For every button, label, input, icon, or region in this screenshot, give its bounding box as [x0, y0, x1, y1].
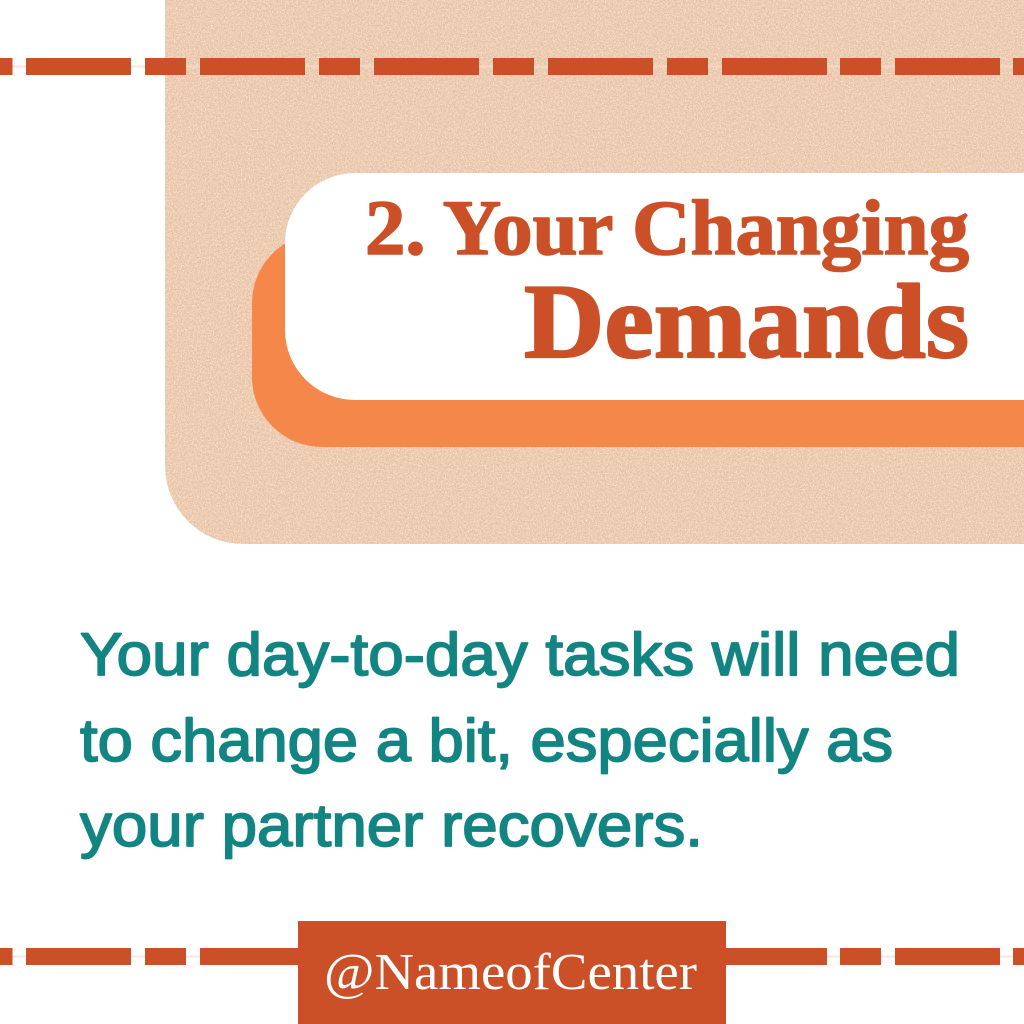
card: white: [285, 173, 1024, 400]
title card: [252, 173, 1024, 447]
bottom dashed line: [0, 948, 1024, 965]
top dashed line: [0, 58, 1024, 75]
handle text: @NameofCenter: [324, 944, 697, 1001]
body line 3: your partner recovers.: [80, 792, 703, 859]
body line 2: to change a bit, especially as: [80, 707, 893, 774]
body line 1: Your day-to-day tasks will need: [80, 621, 960, 688]
body text: [80, 621, 960, 859]
card shadow: orange: [252, 233, 1024, 447]
handle tag: [298, 921, 726, 1024]
panel: textured beige background: [165, 0, 1024, 544]
heading line 1: 2. Your Changing: [365, 184, 969, 271]
heading: [365, 184, 969, 380]
heading line 2: Demands: [524, 263, 969, 380]
tag background: [298, 921, 726, 1024]
